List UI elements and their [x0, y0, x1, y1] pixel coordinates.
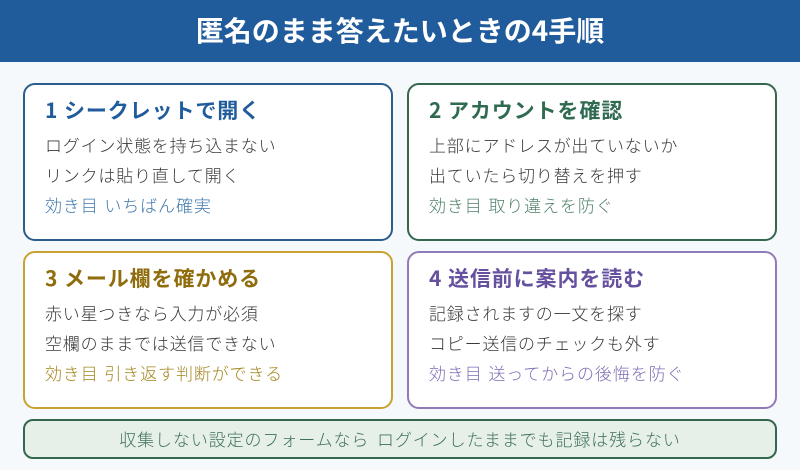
text: step 1 line 1: ログイン状態を持ち込まない [45, 132, 276, 157]
text: step 4 line 1: 記録されますの一文を探す [429, 300, 643, 325]
text: step 4 benefit: 効き目 送ってからの後悔を防ぐ [429, 360, 684, 385]
callout: footer note [23, 419, 777, 459]
text: step 4 line 2: コピー送信のチェックも外す [429, 330, 660, 355]
text: step 1 line 2: リンクは貼り直して開く [45, 162, 240, 187]
text: step 2 line 1: 上部にアドレスが出ていないか [429, 132, 678, 157]
panel: step 4 read notice [407, 251, 777, 409]
text: step 1 benefit: 効き目 いちばん確実 [45, 192, 212, 217]
heading: step 3: 3 メール欄を確かめる [45, 263, 261, 293]
heading: step 4: 4 送信前に案内を読む [429, 263, 645, 293]
panel: step 1 incognito [23, 83, 393, 241]
text: step 3 line 1: 赤い星つきなら入力が必須 [45, 300, 259, 325]
heading: step 2: 2 アカウントを確認 [429, 95, 623, 125]
text: step 3 line 2: 空欄のままでは送信できない [45, 330, 276, 355]
callout: footer note: 収集しない設定のフォームなら ログインしたままでも記録は残らない [119, 426, 681, 451]
title: 匿名のまま答えたいときの4手順 [196, 10, 604, 50]
panel: step 3 email field [23, 251, 393, 409]
panel: step 2 account [407, 83, 777, 241]
heading: step 1: 1 シークレットで開く [45, 95, 261, 125]
text: step 2 line 2: 出ていたら切り替えを押す [429, 162, 643, 187]
title banner [0, 0, 800, 62]
text: step 2 benefit: 効き目 取り違えを防ぐ [429, 192, 614, 217]
text: step 3 benefit: 効き目 引き返す判断ができる [45, 360, 283, 385]
